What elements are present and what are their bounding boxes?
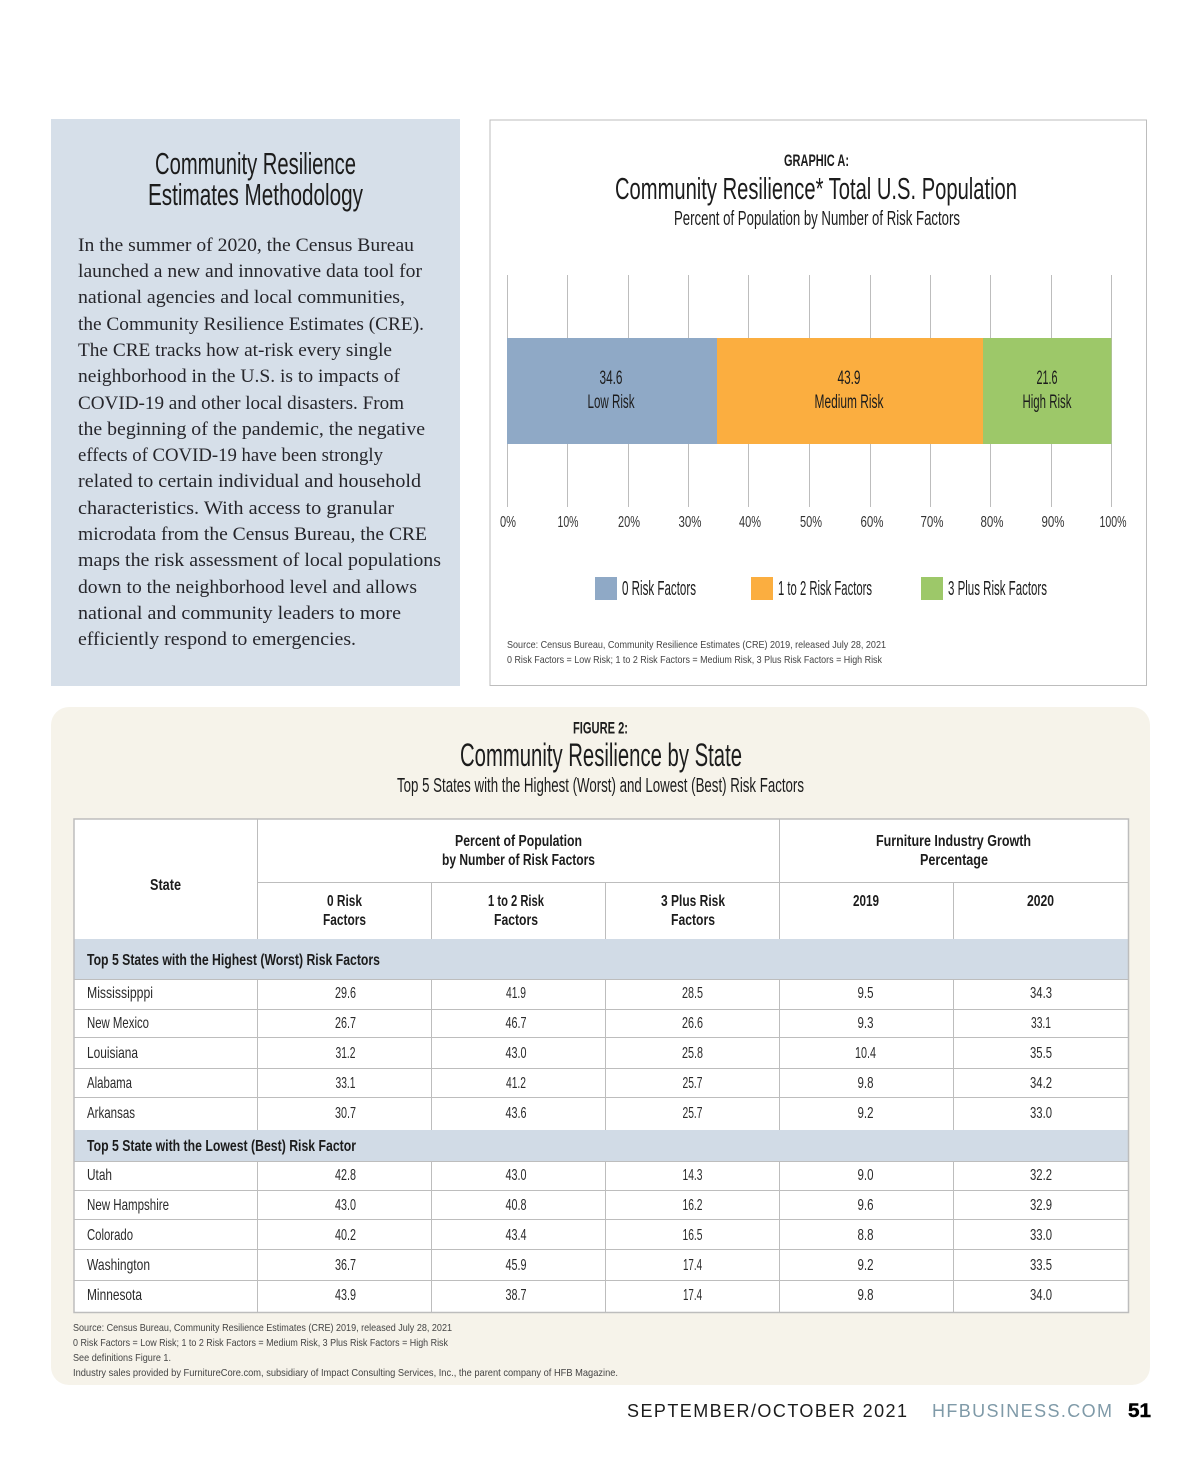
x axis labels: 70% [920,514,944,531]
source note: figure 2: Source: Census Bureau, Community Resilience Estimates (CRE) 2019, released July 28, 2021 [73,1322,452,1334]
legend: 1 to 2 Risk Factors [778,578,872,600]
table rows: highest risk states: Louisiana [87,1045,138,1062]
text block: methodology body: the Community Resilience Estimates (CRE). [78,314,424,335]
table rows: lowest risk states: 43.4 [506,1227,527,1244]
panel: figure 2 [51,707,1150,1385]
heading: figure 2 [397,718,804,797]
table rows: highest risk states: Mississipppi [87,985,153,1002]
table rows: highest risk states: 41.2 [506,1075,526,1092]
text block: methodology body: neighborhood in the U.S. is to impacts of [78,366,401,387]
text block: methodology body: related to certain individual and household [78,471,422,492]
heading: figure 2: Top 5 States with the Highest (Worst) and Lowest (Best) Risk Factors [397,775,804,797]
table header: Factors [671,912,715,929]
x axis labels: 100% [1100,514,1126,531]
table rows: highest risk states: 25.7 [682,1075,703,1092]
text block: methodology body [78,235,441,650]
table rows: highest risk states: 46.7 [506,1015,527,1032]
panel: graphic A [490,120,1146,686]
table rows: highest risk states: 34.3 [1030,985,1052,1002]
table rows: lowest risk states: 16.2 [682,1197,703,1214]
text block: methodology body: maps the risk assessment of local populations [78,550,441,571]
bar segment: high risk: 21.6 [1036,368,1058,389]
text block: methodology body: In the summer of 2020, the Census Bureau [78,235,415,256]
bar segment: low risk: Low Risk [588,392,635,413]
table rows: lowest risk states: 9.8 [858,1287,874,1304]
text block: methodology body: launched a new and innovative data tool for [78,261,423,282]
table header: 1 to 2 Risk [488,893,544,910]
heading: graphic A: GRAPHIC A: [784,151,849,170]
table rows: highest risk states: 9.2 [858,1105,874,1122]
x axis labels: 90% [1042,514,1064,531]
text block: methodology body: effects of COVID-19 have been strongly [78,445,383,466]
page footer: SEPTEMBER/OCTOBER 2021 [627,1401,907,1421]
table rows: highest risk states: 28.5 [682,985,703,1002]
text block: methodology body: efficiently respond to emergencies. [78,629,356,650]
source note: graphic A: 0 Risk Factors = Low Risk; 1 to 2 Risk Factors = Medium Risk, 3 Plus Risk Factors = High Risk [507,654,883,666]
table rows: lowest risk states: Colorado [87,1227,133,1244]
table rows: lowest risk states: 43.9 [335,1287,356,1304]
x axis labels: 60% [860,514,884,531]
table rows: lowest risk states: 32.2 [1030,1167,1052,1184]
table rows: highest risk states: Alabama [87,1075,132,1092]
table rows: lowest risk states [87,1167,1052,1304]
table header: Factors [494,912,538,929]
page footer: HFBUSINESS.COM [932,1401,1112,1421]
bar segment: medium risk [717,338,983,444]
table header: by Number of Risk Factors [442,852,595,869]
legend: 3 Plus Risk Factors [948,578,1047,600]
text block: methodology body: the beginning of the pandemic, the negative [78,419,425,440]
table header: Percentage [920,852,988,869]
table header: Factors [323,912,366,929]
x axis labels: 30% [678,514,702,531]
table rows: highest risk states: New Mexico [87,1015,149,1032]
table rows: highest risk states: 35.5 [1030,1045,1052,1062]
table rows: highest risk states: 25.8 [682,1045,703,1062]
table rows: highest risk states: 43.6 [506,1105,527,1122]
table rows: lowest risk states: 32.9 [1030,1197,1052,1214]
table rows: lowest risk states: Utah [87,1167,112,1184]
table rows: highest risk states: 25.7 [682,1105,703,1122]
text block: methodology body: characteristics. With access to granular [78,498,395,519]
table header: Percent of Population [455,833,582,850]
table rows: highest risk states: 43.0 [506,1045,527,1062]
heading: figure 2: FIGURE 2: [573,718,628,738]
table rows: lowest risk states: 9.2 [858,1257,874,1274]
source note: graphic A [507,639,886,666]
bar segment: low risk [507,338,717,444]
table rows: lowest risk states: 43.0 [335,1197,356,1214]
table rows: highest risk states: 33.0 [1030,1105,1052,1122]
table rows: highest risk states: 29.6 [335,985,356,1002]
x axis labels: 20% [618,514,640,531]
legend [595,577,1047,600]
table rows: highest risk states: 31.2 [336,1045,356,1062]
text block: methodology body: down to the neighborhood level and allows [78,577,417,598]
bar segment: high risk [983,338,1112,444]
table rows: lowest risk states: 16.5 [682,1227,703,1244]
legend: 0 Risk Factors [622,578,696,600]
panel: methodology [51,119,460,686]
x axis labels: 50% [800,514,822,531]
table rows: highest risk states: 33.1 [1031,1015,1051,1032]
table rows: highest risk states: 30.7 [335,1105,356,1122]
text block: methodology body: The CRE tracks how at-risk every single [78,340,392,361]
text block: methodology body: national and community leaders to more [78,603,401,624]
table rows: highest risk states: 9.8 [858,1075,874,1092]
heading: methodology: Community Resilience [155,146,356,181]
table rows: lowest risk states: 38.7 [506,1287,527,1304]
heading: graphic A: Percent of Population by Number of Risk Factors [674,208,960,230]
table rows: highest risk states: 34.2 [1030,1075,1052,1092]
table header: 0 Risk [327,893,362,910]
table header: State [150,877,181,894]
bar segment: medium risk: Medium Risk [814,392,884,413]
table rows: highest risk states [87,985,1052,1122]
section heading: highest risk: Top 5 States with the Highest (Worst) Risk Factors [87,952,380,969]
table header: Furniture Industry Growth [876,833,1031,850]
text block: methodology body: microdata from the Census Bureau, the CRE [78,524,427,545]
table header: 2019 [853,893,879,910]
table header: 3 Plus Risk [661,893,725,910]
data table [74,818,1128,1312]
bar segment: low risk: 34.6 [600,368,622,389]
table rows: lowest risk states: 8.8 [858,1227,874,1244]
text block: methodology body: national agencies and local communities, [78,287,405,308]
source note: figure 2: See definitions Figure 1. [73,1352,171,1364]
table rows: lowest risk states: 45.9 [506,1257,527,1274]
bar segment: medium risk: 43.9 [838,368,860,389]
table rows: highest risk states: 26.7 [335,1015,356,1032]
table rows: highest risk states: 41.9 [506,985,526,1002]
table rows: highest risk states: Arkansas [87,1105,135,1122]
heading: graphic A [615,151,1017,230]
heading: methodology: Estimates Methodology [148,177,363,212]
source note: graphic A: Source: Census Bureau, Community Resilience Estimates (CRE) 2019, released July 28, 2021 [507,639,886,651]
table rows: lowest risk states: 14.3 [682,1167,703,1184]
page footer: 51 [1128,1401,1151,1422]
table header [150,833,1054,929]
table rows: lowest risk states: 43.0 [506,1167,527,1184]
table header: 2020 [1027,893,1054,910]
table rows: highest risk states: 9.3 [858,1015,874,1032]
table rows: highest risk states: 10.4 [855,1045,876,1062]
text block: methodology body: COVID-19 and other local disasters. From [78,393,404,414]
table rows: lowest risk states: 33.5 [1030,1257,1052,1274]
table rows: lowest risk states: 40.2 [335,1227,356,1244]
table rows: lowest risk states: 40.8 [506,1197,527,1214]
table rows: lowest risk states: 33.0 [1030,1227,1052,1244]
x axis labels: 0% [500,514,516,531]
table rows: lowest risk states: 17.4 [683,1257,702,1274]
x axis labels [500,514,1126,531]
heading: figure 2: Community Resilience by State [460,737,742,773]
heading: methodology [148,146,363,212]
table rows: lowest risk states: 9.6 [858,1197,874,1214]
x axis labels: 40% [739,514,761,531]
source note: figure 2: 0 Risk Factors = Low Risk; 1 to 2 Risk Factors = Medium Risk, 3 Plus Risk Factors = High Risk [73,1337,449,1349]
table rows: highest risk states: 9.5 [858,985,874,1002]
table rows: lowest risk states: Washington [87,1257,150,1274]
table rows: lowest risk states: 42.8 [335,1167,356,1184]
x axis labels: 80% [980,514,1004,531]
table rows: lowest risk states: 17.4 [683,1287,702,1304]
source note: figure 2: Industry sales provided by FurnitureCore.com, subsidiary of Impact Consulting Services, Inc., the parent company of HFB Magazine. [73,1367,618,1379]
section heading: lowest risk: Top 5 State with the Lowest (Best) Risk Factor [87,1138,356,1155]
page footer [627,1401,1151,1422]
table rows: lowest risk states: 36.7 [335,1257,356,1274]
table rows: highest risk states: 33.1 [336,1075,356,1092]
table rows: highest risk states: 26.6 [682,1015,703,1032]
table rows: lowest risk states: Minnesota [87,1287,142,1304]
source note: figure 2 [73,1322,618,1379]
bar segment: high risk: High Risk [1022,392,1072,413]
table rows: lowest risk states: New Hampshire [87,1197,169,1214]
table rows: lowest risk states: 34.0 [1030,1287,1052,1304]
stacked bar chart [500,275,1126,531]
table rows: lowest risk states: 9.0 [858,1167,874,1184]
x axis labels: 10% [558,514,578,531]
